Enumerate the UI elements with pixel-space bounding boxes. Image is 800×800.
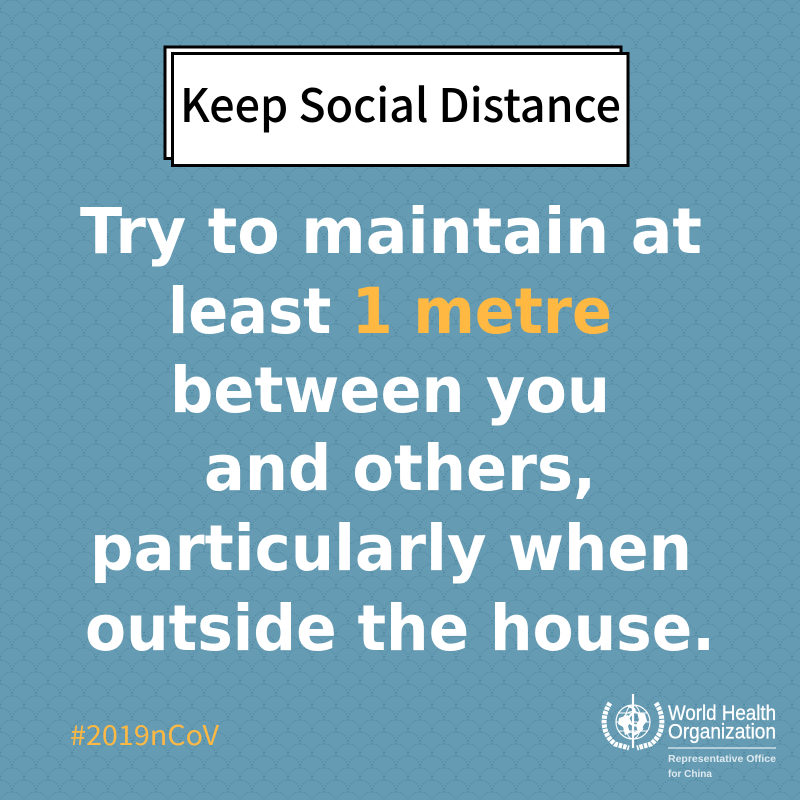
staff and serpent	[632, 694, 634, 748]
icon: WHO emblem	[604, 694, 662, 748]
left laurel	[604, 703, 629, 748]
main message: outside the house.	[85, 592, 715, 665]
organisation name: World Health	[668, 702, 776, 725]
back card	[165, 47, 621, 158]
globe	[616, 705, 650, 739]
logo: WHO: Organization	[668, 720, 776, 744]
front card	[172, 54, 628, 166]
hashtag: #2019nCoV	[70, 714, 219, 753]
main message	[80, 195, 715, 665]
divider	[668, 748, 776, 749]
main message: particularly when	[90, 512, 692, 585]
logo: WHO: for China	[668, 768, 712, 780]
office name: Representative Office	[668, 753, 776, 765]
title text: Keep Social Distance	[180, 70, 621, 136]
title	[165, 47, 628, 166]
main message: and others,	[204, 432, 596, 505]
main message: Try to maintain at	[80, 195, 702, 268]
main message: least 1 metre	[168, 275, 612, 348]
right laurel	[637, 703, 662, 748]
main message: between you	[170, 354, 610, 427]
logo: WHO	[604, 694, 776, 780]
continents	[618, 712, 647, 735]
